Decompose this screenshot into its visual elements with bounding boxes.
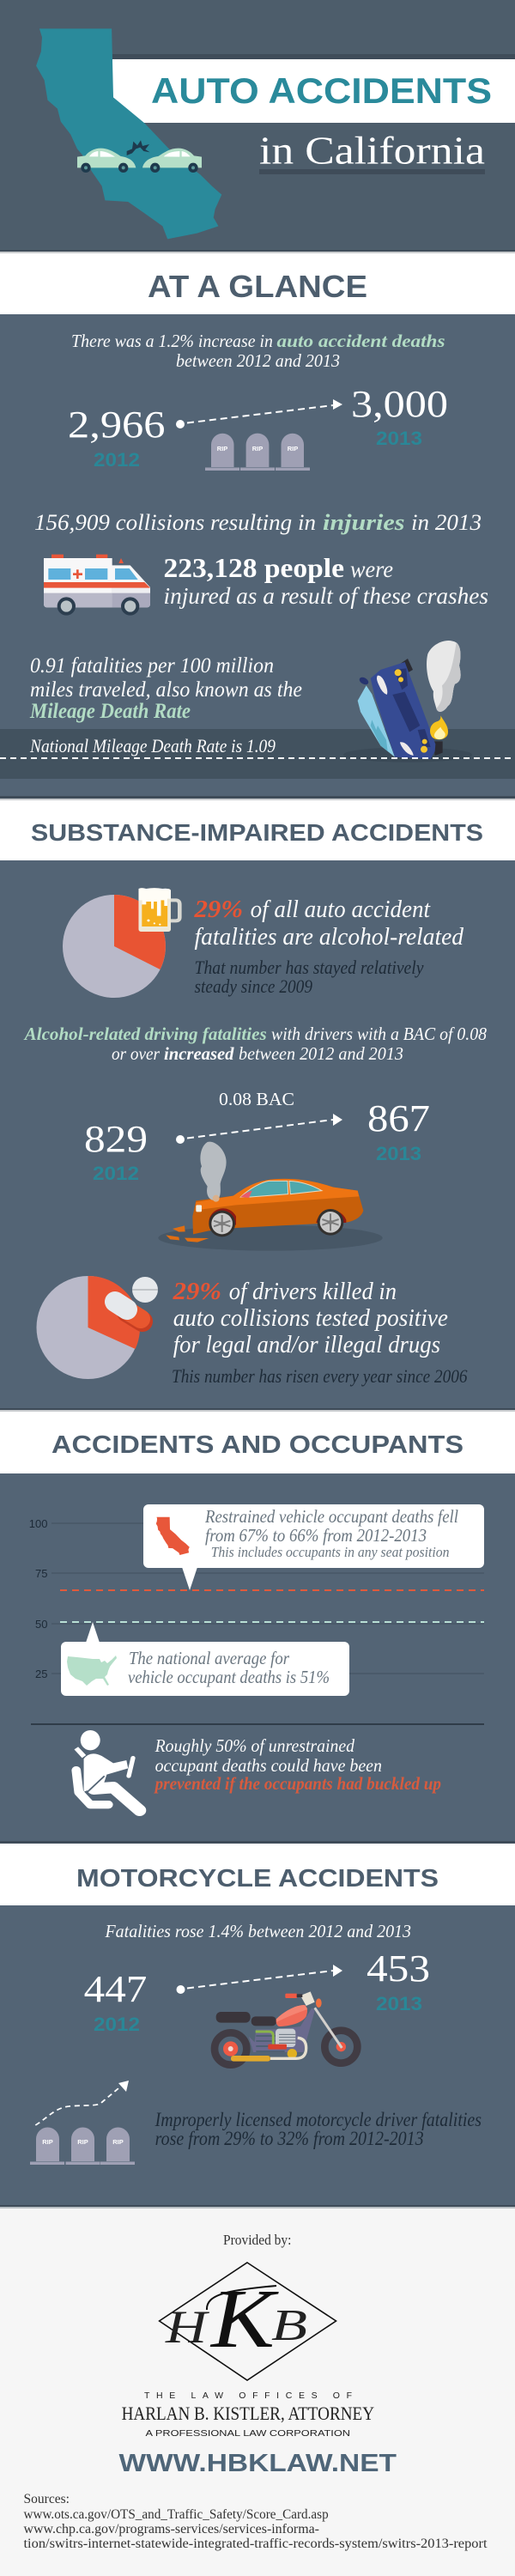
stat: 453: 2013 <box>376 1993 422 2014</box>
stat: 3,000: 3,000 <box>351 383 448 425</box>
arrow <box>177 1965 342 1994</box>
text: sources: tion/switrs-internet-statewide-integrated-traffic-records-system/switrs-2013-report <box>24 2537 488 2551</box>
text: sources: Sources: <box>24 2492 70 2506</box>
text: sources: www.chp.ca.gov/programs-services/services-informa- <box>24 2522 319 2537</box>
line chart: 25 <box>35 1668 48 1680</box>
callout: national average: The national average for <box>129 1648 290 1668</box>
stat: 867: 2013 <box>376 1143 421 1164</box>
panel: accidents and occupants <box>0 1412 515 1844</box>
arrow <box>176 1114 342 1144</box>
icon: rising arrow <box>35 2081 129 2125</box>
callout: California restrained deaths <box>143 1504 484 1590</box>
website: WWW.HBKLAW.NET <box>118 2450 397 2477</box>
text: buckled up: prevented if the occupants had buckled up <box>154 1773 441 1794</box>
text: 29% drugs: of drivers killed in <box>229 1279 397 1305</box>
icon: gravestones: RIP <box>252 445 263 453</box>
text: people injured: were <box>350 556 393 582</box>
icon: gravestones <box>205 434 310 471</box>
stat: 2,966 <box>68 404 165 471</box>
text: provided by: Provided by: <box>223 2232 291 2248</box>
callout: national average <box>61 1622 349 1696</box>
text: alcohol-related fatalities: or over <box>112 1043 161 1064</box>
icon: gravestones: RIP <box>112 2138 124 2146</box>
logo: HKB diamond <box>160 2263 336 2380</box>
text: sources <box>24 2492 488 2551</box>
text: national rate: National Mileage Death Rate is 1.09 <box>29 735 276 756</box>
text: steady since 2009 <box>194 957 424 997</box>
icon: overturned car <box>343 641 472 762</box>
stat: 2,966: 2,966 <box>68 404 165 446</box>
panel: substance-impaired accidents <box>0 800 515 1412</box>
firm name block: THE LAW OFFICES OF <box>144 2391 352 2401</box>
line chart: 50 <box>35 1618 48 1631</box>
panel: footer <box>0 2208 515 2576</box>
logo: HKB diamond: H <box>165 2301 210 2353</box>
callout: California restrained deaths: Restrained vehicle occupant deaths fell <box>204 1506 458 1527</box>
text: alcohol-related fatalities: between 2012 and 2013 <box>239 1043 403 1064</box>
text: 29% alcohol: of all auto accident <box>251 896 431 923</box>
icon: motorcycle <box>215 1991 357 2065</box>
stat: 453 <box>367 1947 430 2014</box>
panel: at a glance <box>0 253 515 800</box>
stat: 447: 447 <box>84 1968 147 2010</box>
text: people injured <box>163 552 488 609</box>
text: fatalities rose: Fatalities rose 1.4% between 2012 and 2013 <box>105 1921 411 1941</box>
title: AUTO ACCIDENTS <box>151 70 492 111</box>
text: death increase: There was a 1.2% increase in <box>71 331 273 351</box>
text: death increase <box>71 331 445 371</box>
icon: person with seat belt <box>74 1730 140 1810</box>
stat: 829: 2012 <box>93 1163 139 1184</box>
text: people injured: injured as a result of these crashes <box>163 583 488 609</box>
icon: beer mug <box>138 888 179 932</box>
firm name block: A PROFESSIONAL LAW CORPORATION <box>146 2429 350 2439</box>
panel: motorcycle accidents <box>0 1844 515 2208</box>
text: 29% alcohol: 29% <box>193 896 243 923</box>
icon: crashed orange car <box>158 1142 383 1251</box>
icon: two crashing cars <box>77 140 202 173</box>
text: 29% alcohol <box>193 896 464 951</box>
logo: HKB diamond: K <box>209 2273 279 2366</box>
heading: MOTORCYCLE ACCIDENTS <box>76 1865 439 1893</box>
text: improperly licensed <box>154 2109 482 2149</box>
pie chart: alcohol 29% <box>63 895 166 998</box>
icon: gravestones: RIP <box>77 2138 88 2146</box>
text: steady since 2009: That number has stayed relatively <box>194 957 424 978</box>
text: buckled up: occupant deaths could have been <box>155 1755 382 1776</box>
text: death increase: auto accident deaths <box>276 331 445 351</box>
text: 29% alcohol: fatalities are alcohol-related <box>194 924 464 951</box>
pie chart: drugs 29% <box>36 1276 140 1379</box>
firm name block: HARLAN B. KISTLER, ATTORNEY <box>122 2403 374 2424</box>
stat: 867: 867 <box>367 1097 430 1139</box>
text: improperly licensed: rose from 29% to 32% from 2012-2013 <box>155 2128 424 2149</box>
text: alcohol-related fatalities: Alcohol-related driving fatalities <box>23 1024 267 1044</box>
text: alcohol-related fatalities: increased <box>164 1043 234 1064</box>
stat: 3,000 <box>351 383 448 449</box>
subtitle: in California <box>259 129 485 172</box>
heading: SUBSTANCE-IMPAIRED ACCIDENTS <box>31 819 483 846</box>
icon: gravestones: RIP <box>288 445 298 453</box>
text: mileage death rate: Mileage Death Rate <box>29 700 191 723</box>
icon: gravestones <box>30 2128 135 2165</box>
stat: 453: 453 <box>367 1947 430 1990</box>
firm name block <box>122 2391 374 2439</box>
callout: California restrained deaths: from 67% to 66% from 2012-2013 <box>205 1525 427 1546</box>
text: steady since 2009: steady since 2009 <box>194 975 312 997</box>
logo: HKB diamond: B <box>271 2301 307 2350</box>
icon: ambulance <box>44 555 150 616</box>
text: mileage death rate: 0.91 fatalities per 100 million <box>30 654 274 677</box>
text: sources: www.ots.ca.gov/OTS_and_Traffic_Safety/Score_Card.asp <box>24 2507 329 2522</box>
road <box>0 729 515 779</box>
callout: national average: vehicle occupant deaths is 51% <box>128 1667 330 1687</box>
text: collisions <box>34 510 482 535</box>
stat: 829 <box>84 1118 148 1184</box>
text: 29% drugs <box>173 1279 448 1358</box>
text: collisions: injuries <box>323 510 405 535</box>
arrow <box>176 399 342 428</box>
text: risen since 2006: This number has risen every year since 2006 <box>172 1365 467 1387</box>
label: 0.08 BAC: 0.08 BAC <box>219 1089 294 1109</box>
icon: California map <box>36 28 221 239</box>
text: alcohol-related fatalities <box>23 1024 487 1064</box>
text: people injured: 223,128 people <box>163 552 344 583</box>
icon: gravestones: RIP <box>217 445 227 453</box>
text: 29% drugs: for legal and/or illegal drugs <box>173 1332 440 1358</box>
callout: California restrained deaths: This includes occupants in any seat position <box>211 1544 449 1560</box>
stat: 2,966: 2012 <box>94 449 140 471</box>
text: 29% drugs: auto collisions tested positive <box>173 1305 448 1332</box>
line chart: 75 <box>35 1567 48 1580</box>
text: collisions: in 2013 <box>411 510 482 535</box>
stat: 867 <box>367 1097 430 1164</box>
panel: header <box>0 0 515 253</box>
text: buckled up: Roughly 50% of unrestrained <box>154 1735 354 1756</box>
heading: AT A GLANCE <box>148 269 367 304</box>
line chart <box>29 1517 484 1724</box>
text: mileage death rate <box>29 654 302 723</box>
text: mileage death rate: miles traveled, also known as the <box>30 678 302 702</box>
text: death increase: between 2012 and 2013 <box>176 350 340 371</box>
icon: gravestones: RIP <box>42 2138 53 2146</box>
text: buckled up <box>154 1735 441 1794</box>
line chart: 100 <box>29 1517 48 1530</box>
text: 29% drugs: 29% <box>173 1279 221 1305</box>
stat: 3,000: 2013 <box>376 428 422 449</box>
stat: 447: 2012 <box>94 2014 140 2035</box>
heading: ACCIDENTS AND OCCUPANTS <box>52 1431 464 1459</box>
stat: 447 <box>84 1968 147 2035</box>
text: alcohol-related fatalities: with drivers with a BAC of 0.08 <box>271 1024 487 1044</box>
stat: 829: 829 <box>84 1118 148 1160</box>
text: collisions: 156,909 collisions resulting in <box>34 510 316 535</box>
icon: pills <box>115 1277 158 1321</box>
